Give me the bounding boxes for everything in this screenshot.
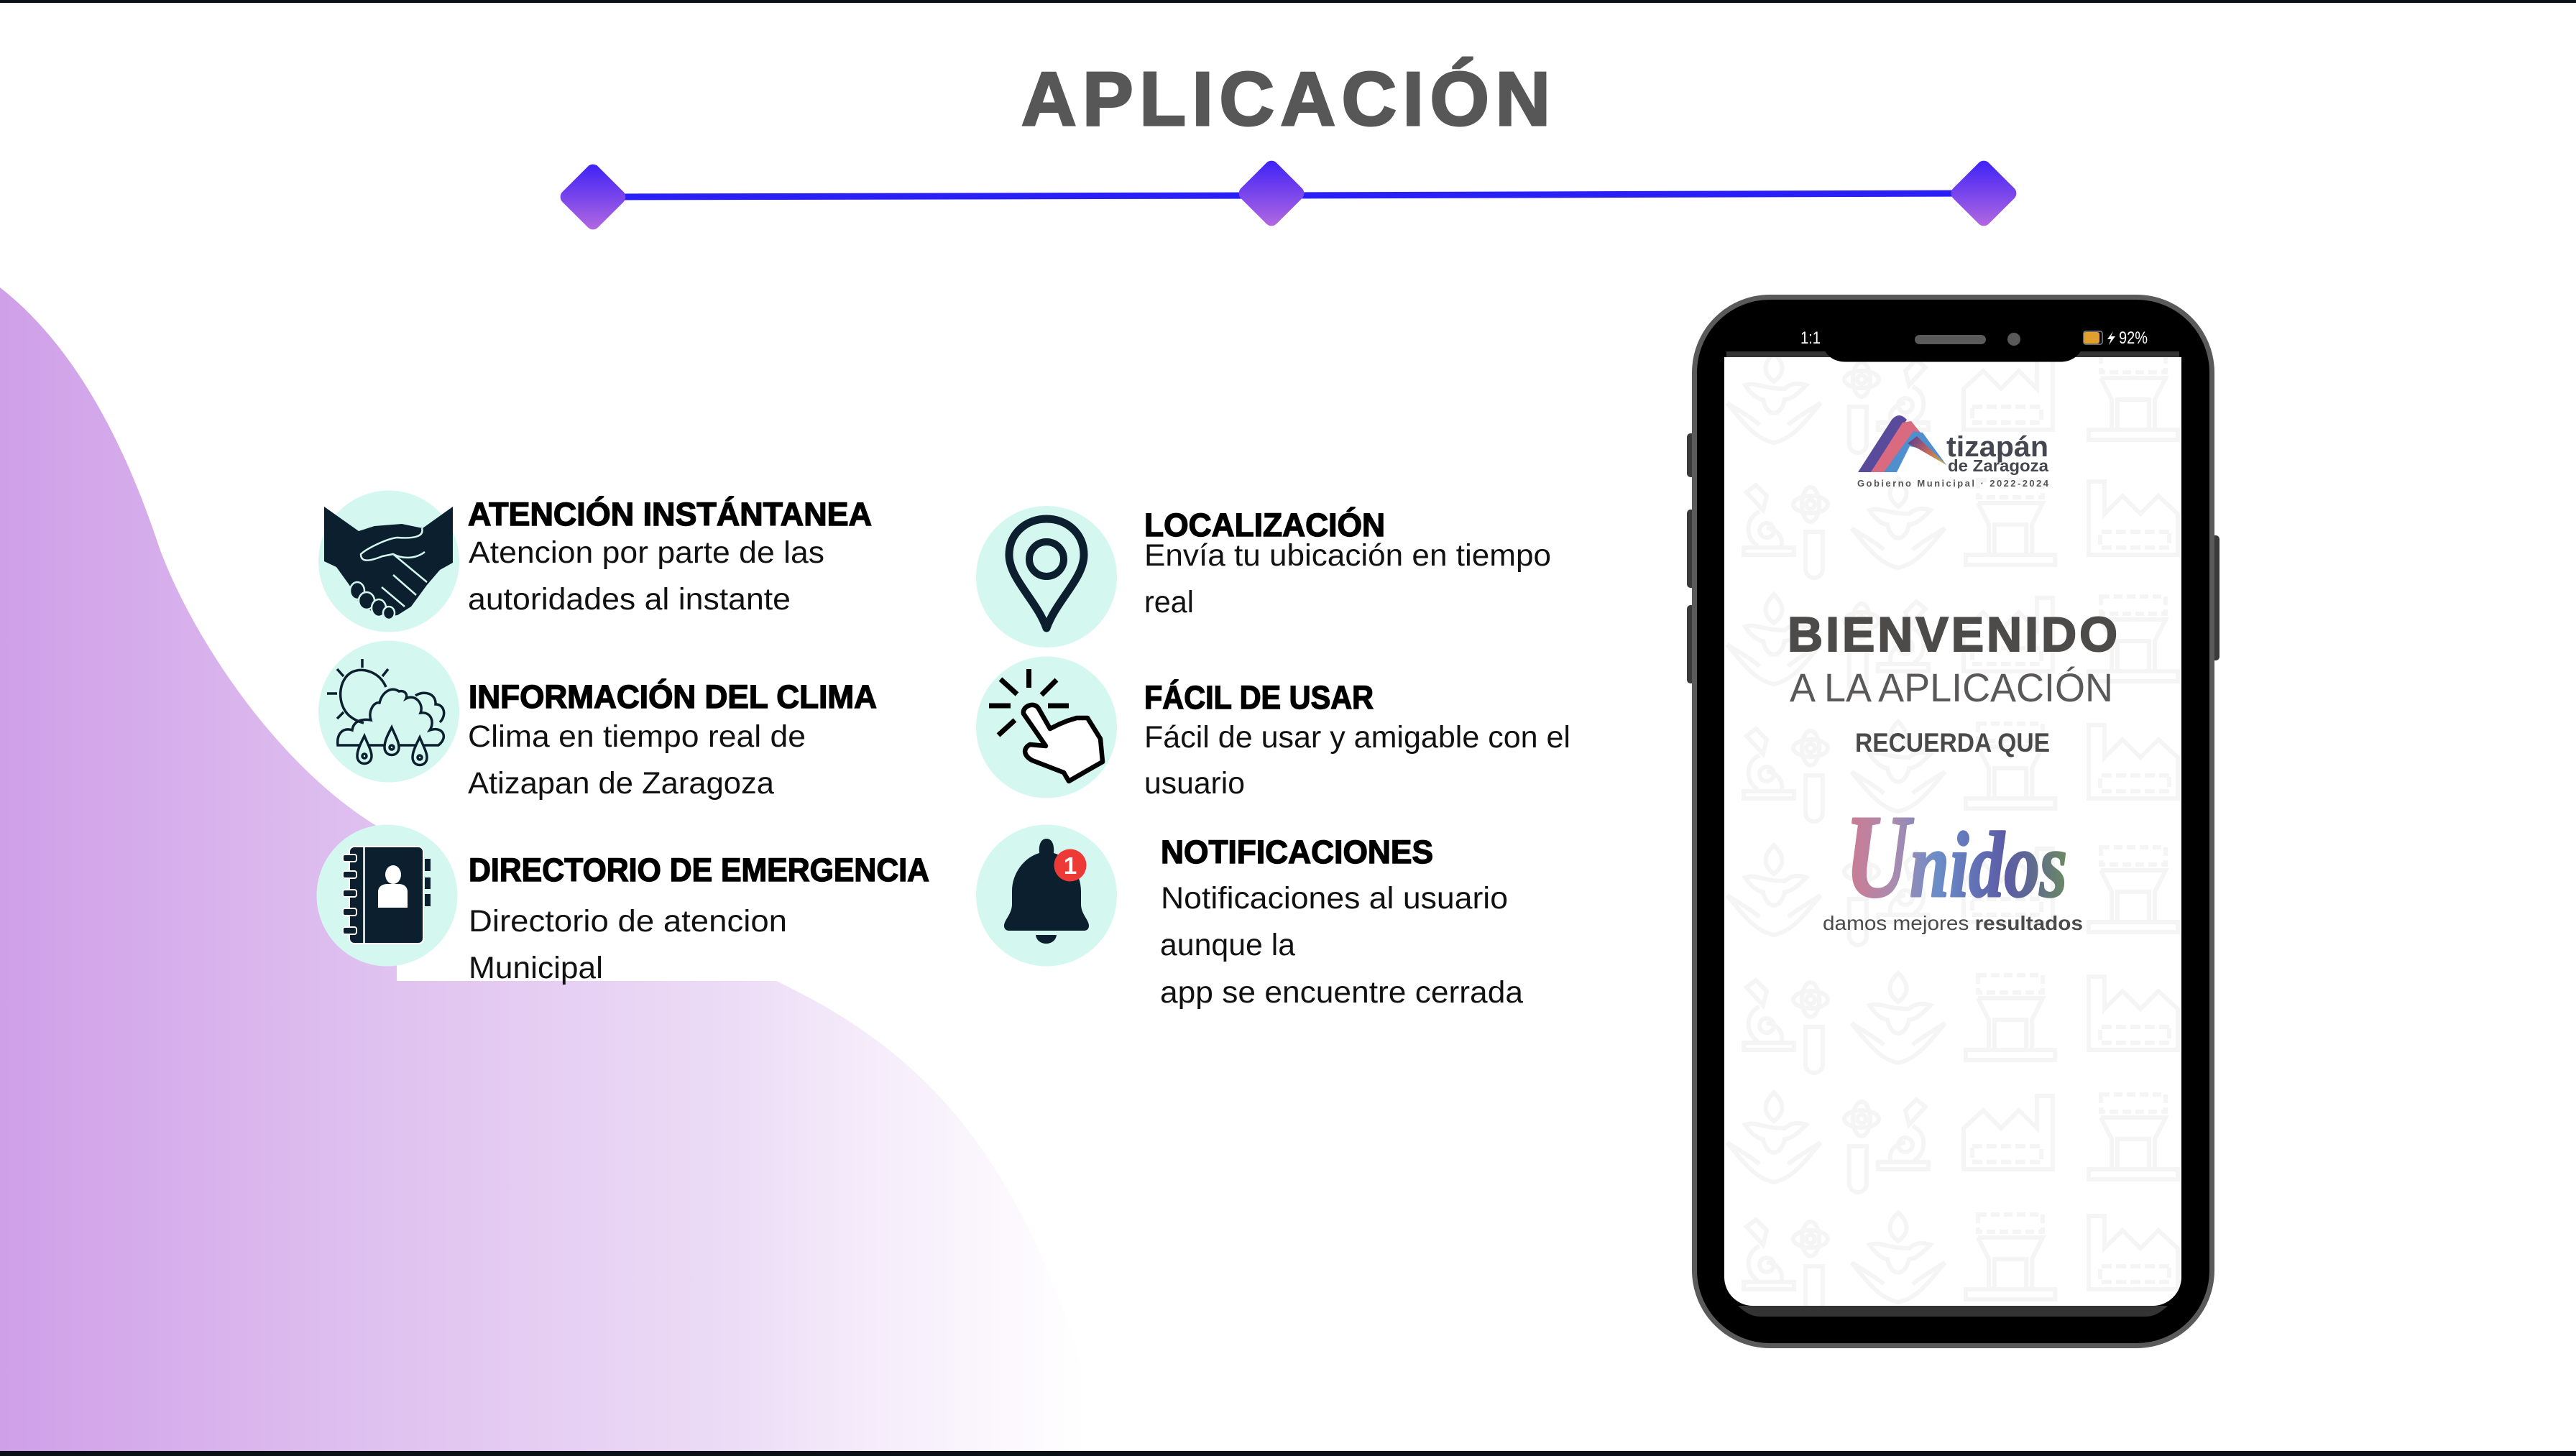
logo: Atizapán de Zaragoza: tizapán — [1946, 431, 2048, 463]
white panel behind features — [397, 791, 972, 981]
description: Atizapan de Zaragoza — [468, 766, 774, 801]
description — [1160, 881, 1523, 1010]
icon: bell with badge — [976, 825, 1117, 966]
description: real — [1144, 585, 1194, 619]
description — [1144, 720, 1570, 801]
heading: ATENCIÓN INSTÁNTANEA — [468, 496, 872, 533]
feature: fácil de usar — [976, 657, 1570, 801]
description — [468, 719, 806, 801]
battery and signal — [2084, 328, 2148, 348]
description: Envía tu ubicación en tiempo — [1144, 538, 1551, 573]
notch — [1822, 316, 2084, 362]
status bar strip — [1726, 351, 2179, 357]
heading: INFORMACIÓN DEL CLIMA — [469, 678, 877, 715]
battery and signal: 92% — [2119, 328, 2148, 348]
description: Atencion por parte de las — [469, 535, 824, 570]
heading: NOTIFICACIONES — [1161, 834, 1433, 870]
speaker — [1915, 335, 1986, 344]
diamond left — [558, 162, 628, 232]
logo: Unidos: Unidos — [1845, 791, 2067, 922]
line — [618, 193, 1984, 197]
logo: Unidos: damos mejores resultados — [1823, 912, 2083, 934]
diamond right — [1949, 158, 2019, 229]
phone mockup — [1687, 298, 2220, 1345]
clock: 1:1 — [1800, 328, 1821, 348]
heading: LOCALIZACIÓN — [1144, 507, 1385, 543]
heading: DIRECTORIO DE EMERGENCIA — [469, 852, 929, 888]
icon: sun, cloud and rain — [318, 641, 459, 782]
icon: hand tapping — [976, 657, 1117, 798]
phone body — [1695, 298, 2212, 1345]
icon: handshake — [318, 490, 459, 632]
feature: directorio de emergencia — [316, 825, 929, 985]
description: aunque la — [1160, 928, 1295, 962]
feature: notificaciones — [976, 825, 1523, 1010]
bottom border — [0, 1451, 2576, 1456]
bottom strip — [1738, 1306, 2168, 1317]
logo: Atizapán de Zaragoza: Gobierno Municipal · 2022-2024 — [1857, 478, 2049, 489]
description: Clima en tiempo real de — [468, 719, 806, 754]
description: Municipal — [469, 951, 603, 985]
icon: address book — [316, 825, 457, 966]
reminder: RECUERDA QUE — [1855, 728, 2050, 757]
welcome subheading: A LA APLICACIÓN — [1790, 665, 2113, 710]
description: app se encuentre cerrada — [1160, 975, 1523, 1010]
screen — [1724, 353, 2181, 1312]
camera — [2007, 333, 2020, 346]
icon: map pin — [976, 506, 1117, 648]
side buttons — [1687, 433, 2220, 683]
background curved purple shape — [0, 287, 1110, 1456]
logo: Atizapán de Zaragoza: de Zaragoza — [1948, 456, 2048, 475]
logo: Atizapán de Zaragoza — [1857, 415, 2049, 489]
description — [469, 904, 787, 985]
title: APLICACIÓN — [1021, 57, 1550, 142]
icon: bell with badge: 1 — [1064, 852, 1077, 879]
timeline connector — [558, 158, 2019, 232]
feature: información del clima — [318, 641, 877, 801]
description: autoridades al instante — [468, 582, 791, 617]
welcome heading: BIENVENIDO — [1788, 607, 2117, 662]
feature: atención instántanea — [318, 490, 872, 632]
description: Notificaciones al usuario — [1161, 881, 1508, 916]
description — [468, 535, 824, 617]
description: Directorio de atencion — [469, 904, 787, 939]
description: usuario — [1144, 766, 1245, 801]
heading: FÁCIL DE USAR — [1144, 679, 1374, 716]
top border — [0, 0, 2576, 3]
wallpaper pattern — [1727, 353, 2178, 1312]
feature: localización — [976, 506, 1551, 648]
description — [1144, 538, 1551, 619]
description: Fácil de usar y amigable con el — [1144, 720, 1570, 755]
diamond middle — [1236, 158, 1307, 229]
